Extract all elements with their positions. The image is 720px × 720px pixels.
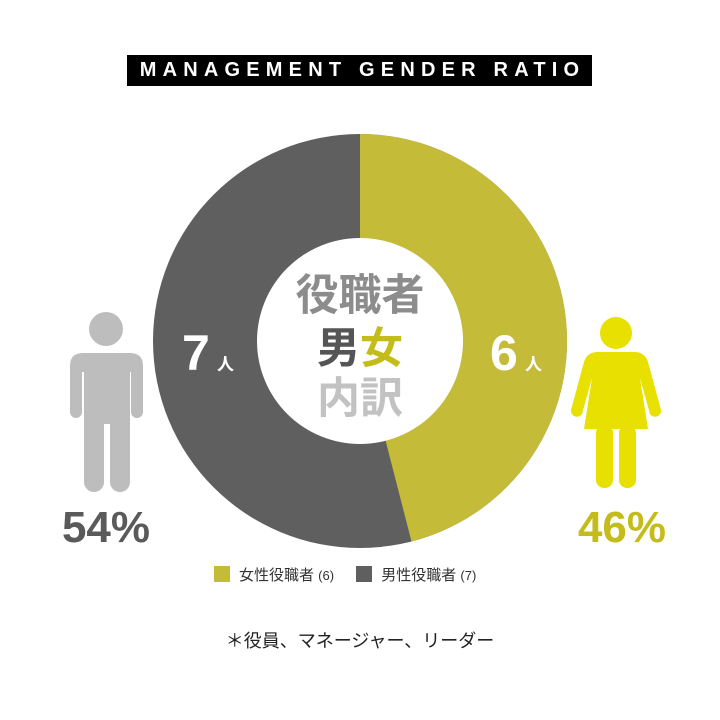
label: 6 people: 人	[525, 350, 542, 375]
icon: female	[571, 317, 661, 488]
percent: male: 54%	[62, 503, 150, 552]
legend: 女性役職者 (6) 男性役職者 (7)	[239, 567, 476, 584]
percent: female: 46%	[578, 503, 666, 552]
center hole	[257, 238, 463, 444]
icon: male	[70, 312, 143, 492]
center text	[296, 261, 424, 426]
center text: 内訳	[317, 364, 403, 426]
label: 6 people	[490, 325, 542, 381]
center text: 役職者	[296, 261, 424, 323]
label: 7 people	[182, 325, 234, 381]
label: 7 people: 7	[182, 325, 210, 381]
center text: 男女	[317, 314, 403, 376]
footnote: ＊役員、マネージャー、リーダー	[226, 631, 494, 651]
label: 7 people: 人	[217, 350, 234, 375]
segment: female	[360, 134, 567, 541]
title: MANAGEMENT GENDER RATIO	[140, 59, 585, 81]
title	[127, 55, 592, 86]
segment: male	[153, 134, 567, 548]
label: 6 people: 6	[490, 325, 518, 381]
